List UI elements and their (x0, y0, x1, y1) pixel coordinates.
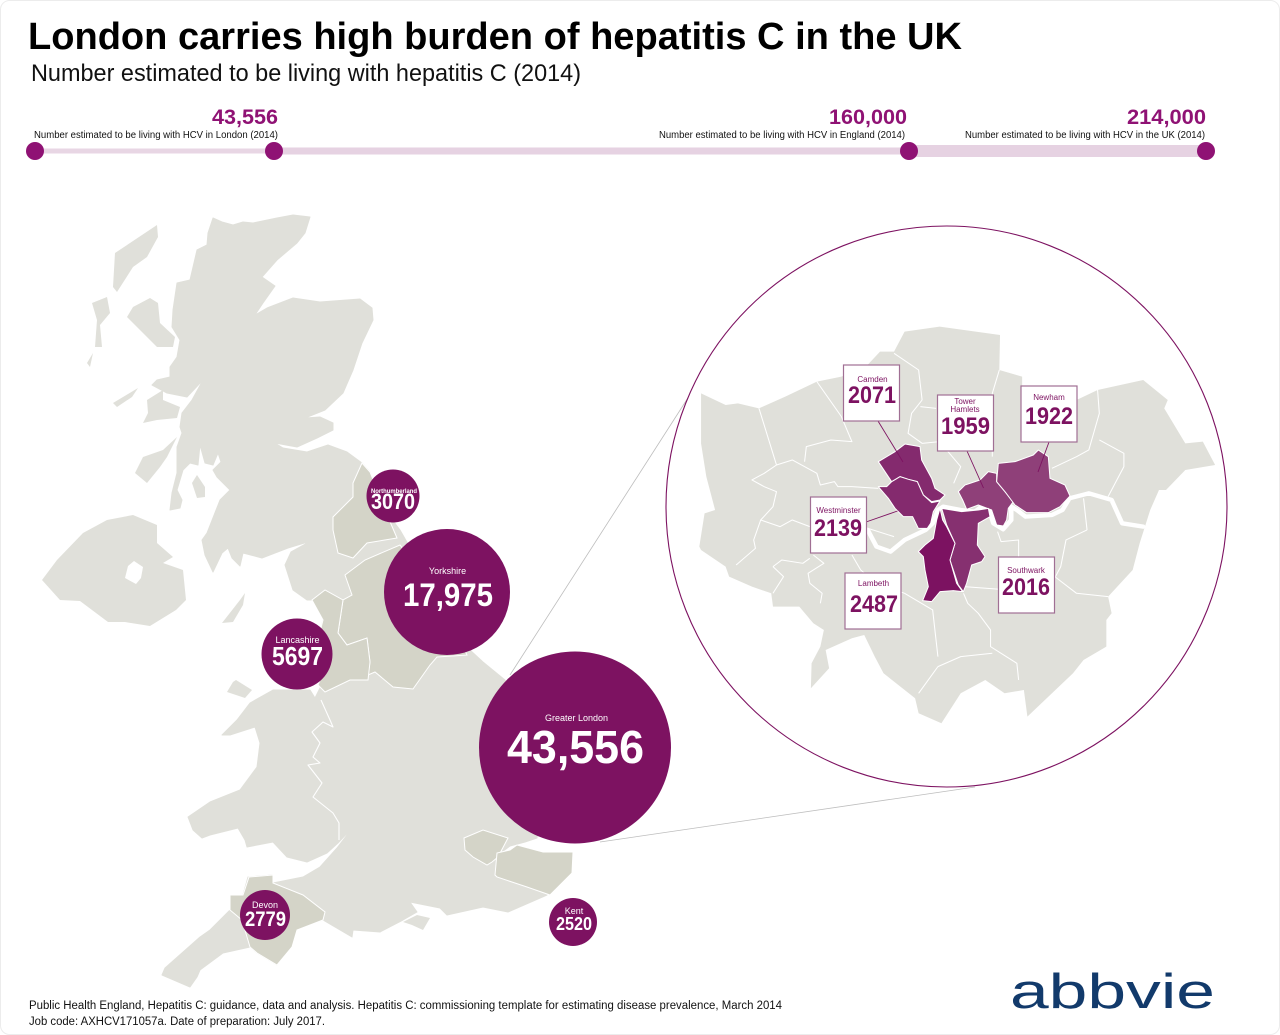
London figure: Number estimated to be living with HCV in London (2014) (34, 130, 278, 141)
bubble: Kent (549, 898, 597, 946)
Kent region (495, 845, 573, 895)
bubble: Greater London: 43,556 (507, 721, 644, 773)
Mull (143, 390, 180, 423)
Northumberland region (333, 463, 397, 558)
England figure (659, 106, 907, 141)
callout: Tower Hamlets (938, 395, 994, 451)
title: London carries high burden of hepatitis C in the UK (28, 16, 963, 58)
Devon region (230, 875, 325, 965)
borough: Westminster (878, 477, 940, 528)
Yorkshire region (338, 545, 467, 689)
London figure: 43,556 (212, 106, 278, 129)
Anglesey (227, 680, 252, 698)
callout: Camden (844, 365, 900, 421)
callout: Westminster (810, 497, 866, 553)
bubble: Lancashire: Lancashire (275, 635, 320, 645)
callout: Westminster: 2139 (814, 515, 862, 542)
Wales border (308, 700, 339, 840)
bubble: Lancashire (262, 618, 332, 690)
inset circle: London boroughs (666, 226, 1227, 787)
callout: Tower Hamlets: 1959 (941, 413, 990, 440)
footnote: Public Health England, Hepatitis C: guidance, data and analysis. Hepatitis C: commissioning template for estimating disease prevalence, March 2014 (29, 1000, 783, 1012)
bubble: Northumberland: Northumberland (371, 488, 417, 495)
borough: Tower Hamlets (958, 472, 1013, 526)
Isle of Wight (403, 915, 430, 930)
scale bar: estimated numbers living with HCV (26, 106, 1215, 160)
Coll and Tiree (113, 388, 138, 407)
bubble: Yorkshire: Yorkshire (429, 566, 466, 576)
callout: Lambeth: Lambeth (858, 579, 889, 588)
borough: Camden (878, 444, 945, 502)
callout: Tower Hamlets: Hamlets (950, 405, 980, 414)
borough boundaries (736, 353, 1124, 693)
Lewis (113, 225, 158, 292)
Lancashire region (312, 590, 370, 692)
subtitle: Number estimated to be living with hepatitis C (2014) (31, 60, 581, 87)
England figure: 160,000 (829, 106, 907, 129)
borough: Southwark (942, 508, 990, 592)
logo: AbbVie: abbvie (1010, 965, 1215, 1019)
bubble: Lancashire: 5697 (272, 641, 323, 671)
callout: Camden: Camden (857, 375, 888, 384)
Great Britain (152, 215, 547, 987)
Skye (127, 298, 175, 347)
callout: Lambeth (845, 573, 901, 629)
borough: Lambeth (918, 508, 963, 602)
England figure: Number estimated to be living with HCV in England (2014) (659, 130, 905, 141)
London figure (34, 106, 278, 141)
bubble: Kent: 2520 (556, 914, 592, 934)
bubble: Yorkshire: 17,975 (403, 577, 493, 613)
bubble: Yorkshire (384, 529, 510, 655)
bubble: Devon: 2779 (245, 908, 286, 931)
callout: Lambeth: 2487 (850, 591, 898, 618)
callout: Southwark: 2016 (1002, 574, 1050, 601)
borough: Newham (997, 450, 1070, 513)
Greater London map (699, 327, 1215, 723)
callout: Southwark (998, 557, 1054, 613)
callout: Newham: Newham (1033, 393, 1065, 402)
UK figure: 214,000 (1127, 106, 1206, 129)
UK map (42, 215, 573, 987)
Islay and Jura (135, 437, 177, 483)
UK figure (965, 106, 1206, 141)
footnote: Job code: AXHCV171057a. Date of preparation: July 2017. (29, 1016, 325, 1028)
bubble: Kent: Kent (565, 906, 584, 916)
Greater London region (464, 830, 508, 865)
bubble: Devon (240, 890, 290, 940)
Isle of Man (222, 593, 245, 623)
highlighted boroughs (878, 444, 1070, 602)
River Thames (868, 493, 1143, 552)
callout: Tower Hamlets: Tower (954, 397, 976, 406)
bubble: Greater London (479, 652, 671, 844)
callout: Southwark: Southwark (1007, 566, 1046, 575)
bubble: Northumberland: 3070 (371, 489, 415, 514)
bubble: Northumberland (366, 470, 420, 522)
Arran (192, 475, 205, 498)
Uists (87, 297, 110, 367)
bubble: Greater London: Greater London (545, 713, 608, 723)
callout: Westminster: Westminster (816, 506, 861, 515)
callout: Camden: 2071 (848, 382, 896, 409)
Northern Ireland (42, 515, 186, 626)
callout: Newham: 1922 (1025, 403, 1073, 430)
callout leader lines (866, 421, 1049, 522)
callout: Newham (1021, 386, 1077, 442)
footnote (29, 1000, 783, 1028)
bubble: Devon: Devon (252, 900, 278, 910)
UK figure: Number estimated to be living with HCV in the UK (2014) (965, 130, 1205, 141)
connector lines to London inset (510, 390, 975, 842)
